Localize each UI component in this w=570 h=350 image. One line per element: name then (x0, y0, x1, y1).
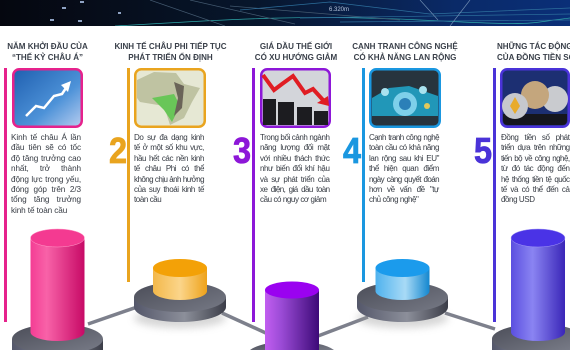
text block 3: xe điện, giá dầu toàn (260, 185, 330, 194)
accent bar 5 (493, 68, 496, 322)
heading 2: KINH TẾ CHÂU PHI TIẾP TỤC (114, 42, 227, 51)
text block 1: kinh tế toàn cầu (11, 206, 67, 215)
text block 1: nhất, trở thành (11, 164, 81, 173)
text block 2: toàn cầu (134, 195, 161, 204)
heading 2: PHÁT TRIỂN ỔN ĐỊNH (128, 53, 213, 62)
text block 5: Đồng tiền số phát (501, 133, 570, 142)
text block 5: tiến bộ về công nghệ, (501, 154, 570, 163)
text block 5 (501, 133, 570, 204)
number 4: 4 (343, 130, 361, 171)
image: Africa map (134, 68, 206, 128)
text block 2: hầu hết các nền kinh (134, 154, 204, 163)
text block 2: không chịu ảnh hưởng (134, 175, 204, 184)
text block 4: toàn cầu có khả năng (369, 143, 439, 152)
text block 1: tổng tăng trưởng (11, 195, 81, 204)
heading 4: CÓ KHẢ NĂNG LAN RỘNG (354, 53, 456, 62)
image: falling oil price (260, 68, 331, 128)
number 5: 5 (474, 130, 492, 171)
accent bar 2 (127, 68, 130, 282)
accent bar 4 (362, 68, 365, 282)
image: rising arrow (12, 68, 83, 128)
text block 4: lan rộng sau khi EU" (369, 154, 439, 163)
text block 5: từ đó tác động đến (501, 164, 570, 173)
heading 3: GIÁ DẦU THẾ GIỚI (260, 42, 332, 51)
heading 3 (255, 42, 337, 62)
text block 3: và sự phát triển của (260, 175, 330, 184)
text block 1: Kinh tế châu Á lần (11, 133, 81, 142)
image: crypto coins (500, 68, 570, 128)
text block 1: độ tăng trưởng cao (11, 154, 81, 163)
text block 5: triển dựa trên những (501, 143, 570, 152)
text block 1: đóng góp trên 2/3 (11, 185, 81, 194)
chart: pillar 1 (12, 229, 103, 350)
number 3: 3 (233, 130, 251, 171)
text block 5: đồng USD (501, 195, 535, 204)
text block 1: đầu tiên sẽ có tốc (11, 143, 81, 152)
number 2: 2 (109, 130, 127, 171)
text block 2 (134, 133, 204, 204)
heading 1 (7, 42, 88, 62)
chart: pillar 5 (492, 229, 570, 350)
text block 1: động lực trọng yếu, (11, 175, 81, 184)
chart: pillar 3 (250, 282, 334, 350)
heading 3: CÓ XU HƯỚNG GIẢM (255, 53, 337, 62)
text block 4 (369, 133, 440, 204)
header banner (0, 0, 570, 26)
text block 5: tế và có thể đến cả (501, 185, 570, 194)
text block 3: cầu có nguy cơ giảm (260, 195, 326, 204)
text block 3: năng lượng đối mặt (260, 143, 330, 152)
chart: pillar 2 (134, 259, 226, 328)
text block 2: tế ở một số khu vực, (134, 143, 204, 152)
text block 3: Trong bối cảnh ngành (260, 133, 330, 142)
chart: pillar 4 (356, 259, 448, 328)
text block 4: hơn về vấn đề "tự (369, 185, 439, 194)
text block 2: của suy thoái kinh tế (134, 185, 204, 194)
heading 2 (114, 42, 227, 62)
heading 1: NĂM KHỞI ĐẦU CỦA (7, 42, 88, 51)
text block 4: thể hiện quan điểm (369, 164, 439, 173)
text block 3: như biến đổi khí hậu (260, 164, 330, 173)
header banner: 6.320m (329, 7, 349, 13)
image: technology globe (369, 68, 441, 128)
text block 2: tế châu Phi có thể (134, 164, 204, 173)
heading 1: “THẾ KỶ CHÂU Á” (12, 53, 83, 62)
heading 4 (352, 42, 458, 62)
accent bar 3 (252, 68, 255, 322)
text block 1 (11, 132, 81, 215)
heading 5 (497, 42, 570, 62)
text block 4: ngày càng quyết đoán (369, 175, 439, 184)
heading 4: CẠNH TRANH CÔNG NGHỆ (352, 42, 458, 51)
text block 3: với nhiều thách thức (260, 154, 330, 163)
text block 4: Cạnh tranh công nghệ (369, 133, 439, 142)
text block 5: hệ thống tiền tệ quốc (501, 175, 570, 184)
accent bar 1 (4, 68, 7, 322)
text block 2: Do sự đa dạng kinh (134, 133, 204, 142)
text block 4: chủ công nghệ" (369, 195, 418, 204)
text block 3 (260, 133, 330, 204)
